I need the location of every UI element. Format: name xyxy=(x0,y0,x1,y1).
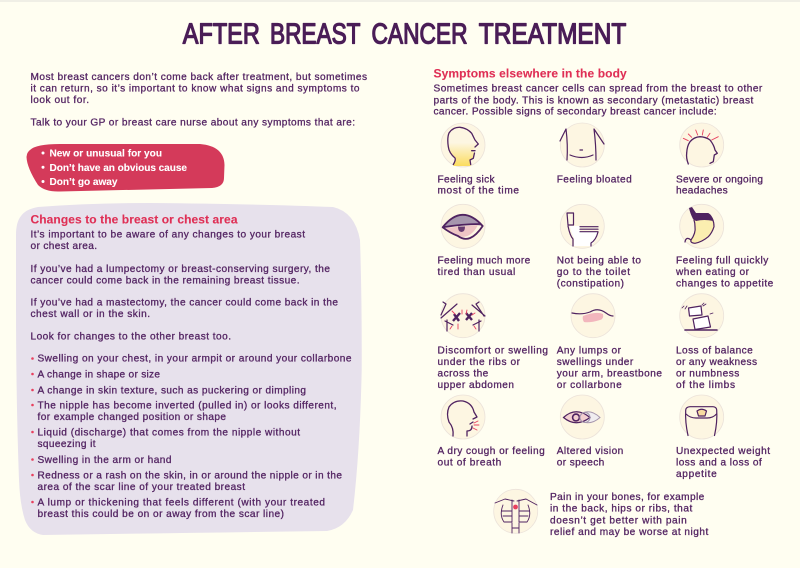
panel heading: Changes to the breast or chest area xyxy=(30,212,238,226)
label: weight: appetite xyxy=(676,469,717,480)
callout: red symptom box xyxy=(26,144,224,192)
icon: feeling sick xyxy=(441,123,485,167)
symptoms intro text: parts of the body. This is known as secondary (metastatic) breast xyxy=(434,95,753,106)
label: cough xyxy=(438,446,545,468)
label: toilet: Not being able to xyxy=(557,255,641,266)
label: cough: A dry cough or feeling xyxy=(438,446,545,457)
intro text: Talk to your GP or breast care nurse about any symptoms that are: xyxy=(30,118,355,128)
label: balance xyxy=(676,345,757,391)
label: tired: tired than usual xyxy=(438,267,515,278)
label: feeling sick: most of the time xyxy=(438,186,519,197)
title: CANCER xyxy=(372,18,468,50)
label: balance: or numbness xyxy=(676,368,739,379)
label: discomfort xyxy=(438,345,548,391)
panel bullet list: The nipple has become inverted (pulled in) or looks different, xyxy=(38,401,336,412)
label: feeling sick: Feeling sick xyxy=(438,174,495,185)
label: vision: Altered vision xyxy=(557,446,623,457)
icon: loss of balance xyxy=(680,294,724,338)
label: lumps xyxy=(557,345,662,391)
label: bone pain: relief and may be worse at night xyxy=(550,527,708,538)
label: toilet: go to the toilet xyxy=(557,267,630,278)
title: TREATMENT xyxy=(479,18,627,50)
label: balance: of the limbs xyxy=(676,380,735,391)
panel intro paragraphs: It’s important to be aware of any changes to your breast xyxy=(30,230,305,241)
panel bullet list: for example changed position or shape xyxy=(38,412,226,423)
label: lumps: swellings under xyxy=(557,357,634,368)
label: headaches: headaches xyxy=(676,186,728,197)
label: lumps: Any lumps or xyxy=(557,345,622,356)
label: toilet xyxy=(557,255,641,289)
panel bullet list: A change in skin texture, such as puckering or dimpling xyxy=(38,385,306,396)
intro text: Most breast cancers don’t come back after treatment, but sometimes xyxy=(30,72,367,83)
icon: stomach xyxy=(680,204,724,248)
icon: dry cough xyxy=(441,395,485,439)
panel intro paragraphs: cancer could come back in the remaining breast tissue. xyxy=(30,276,300,286)
panel bullet list xyxy=(31,354,352,520)
label: feeling sick xyxy=(438,174,519,197)
label: lumps: your arm, breastbone xyxy=(557,368,662,379)
callout: red symptom box: Don’t go away xyxy=(50,177,118,188)
panel intro paragraphs: If you’ve had a lumpectomy or breast-conserving surgery, the xyxy=(30,264,330,275)
label: lumps: or collarbone xyxy=(557,380,622,391)
panel intro paragraphs: If you’ve had a mastectomy, the cancer could come back in the xyxy=(30,298,338,308)
label: discomfort: across the xyxy=(438,368,489,379)
title: AFTER xyxy=(183,18,260,50)
panel bullet list: A change in shape or size xyxy=(38,369,160,380)
panel bullet list: Liquid (discharge) that comes from the nipple without xyxy=(38,428,300,439)
label: weight: Unexpected weight xyxy=(676,446,770,457)
label: headaches xyxy=(676,174,763,197)
label: stomach xyxy=(675,255,774,289)
label: vision xyxy=(557,446,623,468)
label: toilet: (constipation) xyxy=(557,278,624,289)
icon: tired eye xyxy=(441,204,485,248)
panel intro paragraphs: chest wall or in the skin. xyxy=(30,309,150,320)
label: bone pain: doesn’t get better with pain xyxy=(550,515,687,526)
label: discomfort: under the ribs or xyxy=(438,357,521,368)
symptoms intro text xyxy=(434,84,763,118)
panel bullet list: Redness or a rash on the skin, in or around the nipple or in the xyxy=(38,470,342,481)
label: cough: out of breath xyxy=(438,457,501,468)
icon: altered vision xyxy=(560,395,604,439)
label: bone pain: Pain in your bones, for example xyxy=(550,492,705,503)
label: balance: Loss of balance xyxy=(676,345,753,356)
symptoms intro text: cancer. Possible signs of secondary breast cancer include: xyxy=(434,106,717,118)
heading: symptoms elsewhere: Symptoms elsewhere in the body xyxy=(434,67,627,81)
label: stomach: changes to appetite xyxy=(676,278,774,289)
label: stomach: Feeling full quickly xyxy=(676,255,769,266)
intro text: look out for. xyxy=(30,95,89,106)
panel intro paragraphs: or chest area. xyxy=(30,241,97,252)
label: tired xyxy=(438,255,531,278)
intro text: it can return, so it’s important to know what signs and symptoms to xyxy=(30,84,360,94)
title xyxy=(183,18,627,50)
panel intro paragraphs xyxy=(30,230,338,342)
panel bullet list: area of the scar line of your treated breast xyxy=(38,482,245,493)
callout: red symptom box: New or unusual for you xyxy=(50,148,162,160)
label: bone pain: in the back, hips or ribs, that xyxy=(550,504,692,515)
label: balance: or any weakness xyxy=(676,357,757,368)
icon: weight scales xyxy=(680,395,724,439)
icon: discomfort under ribs xyxy=(441,294,485,338)
intro text xyxy=(30,72,367,128)
label: discomfort: Discomfort or swelling xyxy=(438,345,548,356)
label: bone pain xyxy=(550,492,708,538)
label: discomfort: upper abdomen xyxy=(438,380,514,391)
label: headaches: Severe or ongoing xyxy=(676,174,763,185)
panel bullet list: Swelling in the arm or hand xyxy=(38,455,172,466)
panel: changes to the breast or chest area xyxy=(16,203,362,535)
symptoms intro text: Sometimes breast cancer cells can spread from the breast to other xyxy=(434,84,763,95)
panel bullet list: breast this could be on or away from the scar line) xyxy=(38,509,284,520)
label: stomach: when eating or xyxy=(675,267,750,278)
label: vision: or speech xyxy=(557,457,604,468)
icon: lumps xyxy=(571,294,615,338)
label: weight: loss and a loss of xyxy=(676,457,762,468)
panel intro paragraphs: Look for changes to the other breast too. xyxy=(30,332,231,342)
label: feeling bloated: Feeling bloated xyxy=(557,174,632,185)
panel bullet list: A lump or thickening that feels different (with your treated xyxy=(38,497,325,508)
icon: toilet xyxy=(560,204,604,248)
icon: feeling bloated xyxy=(560,123,604,167)
label: weight xyxy=(676,446,770,480)
title: BREAST xyxy=(270,18,361,50)
panel bullet list: squeezing it xyxy=(38,439,96,450)
callout: red symptom box: Don’t have an obvious cause xyxy=(50,163,187,174)
panel bullet list: Swelling on your chest, in your armpit or around your collarbone xyxy=(38,354,352,365)
label: tired: Feeling much more xyxy=(438,255,531,266)
icon: skeleton ribs xyxy=(494,489,538,533)
icon: headaches xyxy=(680,123,724,167)
